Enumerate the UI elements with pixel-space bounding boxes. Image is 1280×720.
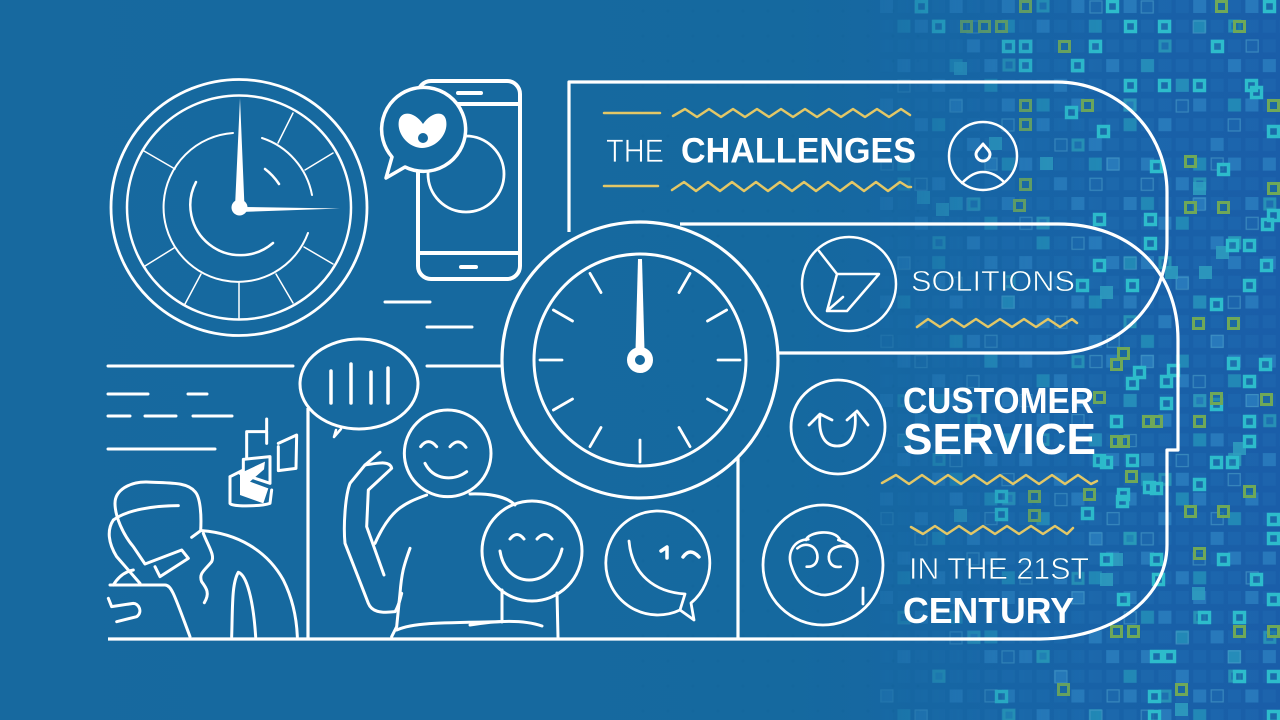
icon: phone with speech bubble — [382, 81, 520, 279]
figure: waving person — [344, 410, 515, 637]
clock: centre wall clock — [502, 222, 778, 498]
heading: solutions: SOLITIONS — [911, 266, 1075, 298]
heading: the challenges: CHALLENGES — [681, 132, 916, 170]
icon: chat bubble smile — [606, 511, 710, 620]
figure: small smiling person — [470, 501, 582, 637]
icon: speech bubble with bars — [300, 339, 418, 437]
heading: customer service: CUSTOMER — [903, 380, 1094, 421]
icon: smile with arrows — [791, 380, 885, 474]
panel outlines — [108, 82, 1178, 639]
figure: person with headset — [108, 419, 297, 637]
clock: left radar clock — [111, 80, 367, 336]
heading: customer service: SERVICE — [903, 415, 1096, 464]
icon: paper plane — [802, 237, 896, 331]
heading: in the 21st century — [903, 526, 1089, 631]
heading: in the 21st century: IN THE 21ST — [909, 551, 1089, 586]
icon: cloud face — [763, 505, 883, 625]
heading: the challenges: THE — [606, 133, 664, 169]
pixel grid pattern — [880, 0, 1280, 720]
short divider lines — [108, 302, 500, 449]
heading: the challenges — [604, 109, 916, 191]
heading: solutions — [911, 266, 1077, 327]
heading: customer service — [882, 380, 1097, 484]
icon: person badge — [949, 122, 1017, 190]
heading: in the 21st century: CENTURY — [903, 590, 1074, 631]
